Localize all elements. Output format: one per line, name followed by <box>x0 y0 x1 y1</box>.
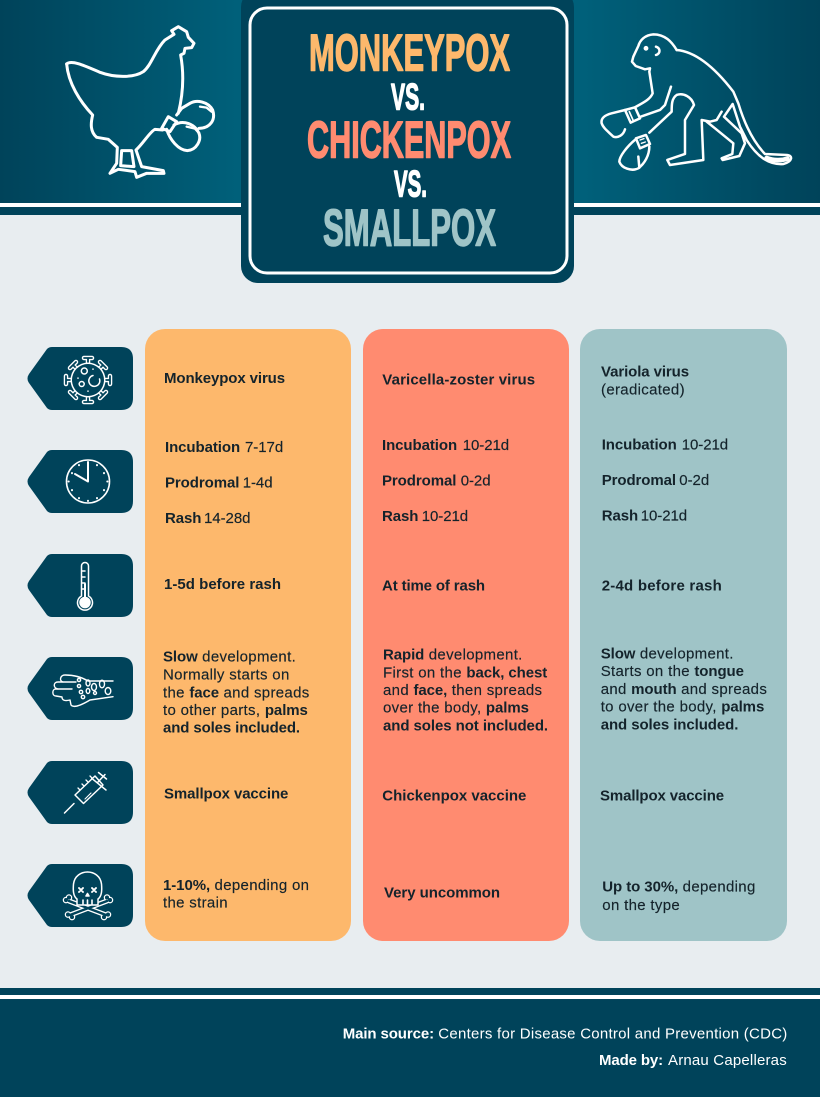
rash description: the face and spreads <box>163 684 310 701</box>
rash description: to other parts, palms <box>163 702 308 719</box>
timeline: 1-4d <box>243 475 273 492</box>
rash description: Normally starts on <box>163 666 290 683</box>
panel: smallpox column <box>580 329 787 941</box>
rash description: and soles included. <box>163 720 300 737</box>
rash description: Slow development. <box>601 645 734 662</box>
timeline: Rash <box>602 508 638 525</box>
timeline: Incubation <box>165 439 240 456</box>
fatality: the strain <box>163 895 228 912</box>
timeline: 0-2d <box>461 473 491 490</box>
rash description: over the body, palms <box>383 700 529 717</box>
made by: Arnau Capelleras <box>668 1052 787 1069</box>
rash description: First on the back, chest <box>383 664 547 681</box>
icon tag: thermometer <box>28 554 133 617</box>
fatality: Up to 30%, depending <box>602 879 756 896</box>
rash description: and soles not included. <box>383 718 548 735</box>
timeline <box>165 439 283 527</box>
header band <box>0 0 820 215</box>
rash description <box>383 646 548 735</box>
icon tag: syringe <box>28 761 133 824</box>
fatality: 1-10%, depending on <box>163 877 309 894</box>
timeline: 10-21d <box>682 436 728 453</box>
timeline: 7-17d <box>245 439 283 456</box>
fatality <box>602 879 756 914</box>
vaccine: Smallpox vaccine <box>164 785 288 802</box>
vaccine: Smallpox vaccine <box>600 788 724 805</box>
crossbones outline <box>66 898 110 917</box>
rash description: Rapid development. <box>383 646 523 663</box>
skull <box>73 872 102 905</box>
timeline <box>382 437 509 525</box>
title: vs second: VS. <box>394 164 427 204</box>
timeline: Prodromal <box>602 472 676 489</box>
timeline: Prodromal <box>382 473 456 490</box>
footer <box>0 988 820 1097</box>
made by: Made by: <box>599 1052 663 1069</box>
title: smallpox: SMALLPOX <box>323 199 496 257</box>
timeline: Incubation <box>602 436 677 453</box>
timeline: 0-2d <box>679 472 709 489</box>
main source: Main source: <box>343 1026 434 1042</box>
agent: Varicella-zoster virus <box>382 371 535 388</box>
agent: Variola virus <box>601 364 689 381</box>
rash description: and soles included. <box>601 716 738 733</box>
timeline: 10-21d <box>463 437 509 454</box>
timeline: 14-28d <box>204 510 250 527</box>
title: vs: VS. <box>391 76 425 118</box>
timeline: 10-21d <box>641 508 687 525</box>
timeline <box>602 436 728 525</box>
title: monkeypox: MONKEYPOX <box>309 24 510 82</box>
vaccine: Chickenpox vaccine <box>382 788 526 805</box>
icon tag: virus <box>28 347 133 410</box>
icon tag: skull and crossbones <box>28 864 133 927</box>
rash description: to over the body, palms <box>601 699 764 716</box>
made by <box>599 1052 787 1069</box>
fatality: on the type <box>602 897 680 914</box>
title box <box>241 0 574 283</box>
title: chickenpox: CHICKENPOX <box>307 111 511 169</box>
main source: Centers for Disease Control and Prevention (CDC) <box>438 1026 787 1042</box>
fatality: Very uncommon <box>384 884 500 901</box>
fatality <box>163 877 309 912</box>
illustration: monkey with boxing gloves <box>602 34 791 170</box>
fever: At time of rash <box>382 578 485 595</box>
timeline: Rash <box>165 510 201 527</box>
agent: (eradicated) <box>601 381 685 398</box>
rash description: and face, then spreads <box>383 682 542 699</box>
agent: Monkeypox virus <box>164 370 285 387</box>
rash description: Slow development. <box>163 649 296 666</box>
rash description: Starts on the tongue <box>601 663 744 680</box>
rash description <box>163 649 310 737</box>
rash description <box>601 645 767 733</box>
timeline: Rash <box>382 508 418 525</box>
icon tag: rash on hand <box>28 657 133 720</box>
timeline: Incubation <box>382 437 457 454</box>
agent <box>601 364 689 398</box>
illustration: chicken with boxing gloves <box>67 27 214 177</box>
timeline: 10-21d <box>422 508 468 525</box>
fever: 2-4d before rash <box>602 578 722 595</box>
panel: chickenpox column <box>363 329 569 941</box>
rash description: and mouth and spreads <box>601 681 767 698</box>
fever: 1-5d before rash <box>164 576 281 593</box>
panel: monkeypox column <box>145 329 351 941</box>
icon tag: clock <box>28 450 133 513</box>
timeline: Prodromal <box>165 475 239 492</box>
